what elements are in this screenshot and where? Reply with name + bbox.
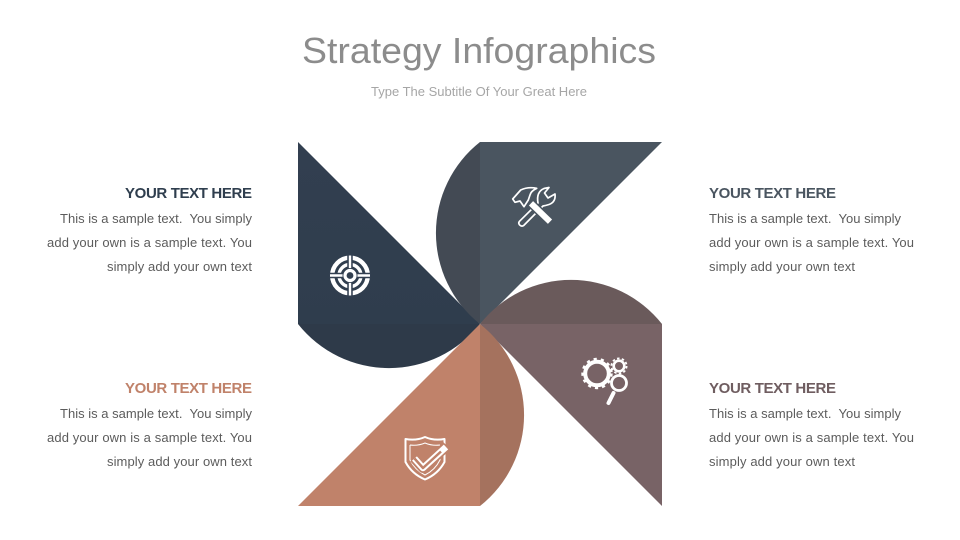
body: This is a sample text. You simply xyxy=(60,406,252,421)
heading: YOUR TEXT HERE xyxy=(709,380,836,397)
text block: top left xyxy=(47,185,252,274)
text block: bottom left xyxy=(47,380,252,469)
body: simply add your own text xyxy=(107,454,252,469)
body: add your own is a sample text. You xyxy=(709,235,914,250)
text block: bottom right xyxy=(709,380,914,469)
heading: YOUR TEXT HERE xyxy=(125,380,252,397)
icon: gears and magnifier xyxy=(582,358,627,403)
pinwheel diagram xyxy=(298,142,662,506)
icon: target xyxy=(329,254,371,297)
heading: YOUR TEXT HERE xyxy=(125,185,252,202)
body: add your own is a sample text. You xyxy=(709,430,914,445)
icon: hammer and wrench xyxy=(513,188,555,226)
text block: top right xyxy=(709,185,914,274)
body xyxy=(709,406,914,469)
body: add your own is a sample text. You xyxy=(47,430,252,445)
body: simply add your own text xyxy=(107,259,252,274)
title: Strategy Infographics xyxy=(302,30,656,71)
blade: slate xyxy=(436,142,662,324)
body xyxy=(709,211,914,274)
body xyxy=(47,406,252,469)
body: simply add your own text xyxy=(709,259,855,274)
body xyxy=(47,211,252,274)
blade: navy xyxy=(298,142,480,368)
body: This is a sample text. You simply xyxy=(709,406,902,421)
blade: brown xyxy=(480,280,662,506)
subtitle: Type The Subtitle Of Your Great Here xyxy=(371,84,587,99)
body: add your own is a sample text. You xyxy=(47,235,252,250)
blade: copper xyxy=(298,324,524,506)
body: This is a sample text. You simply xyxy=(60,211,252,226)
icon: shield with check xyxy=(406,437,447,480)
body: This is a sample text. You simply xyxy=(709,211,902,226)
body: simply add your own text xyxy=(709,454,855,469)
heading: YOUR TEXT HERE xyxy=(709,185,836,202)
